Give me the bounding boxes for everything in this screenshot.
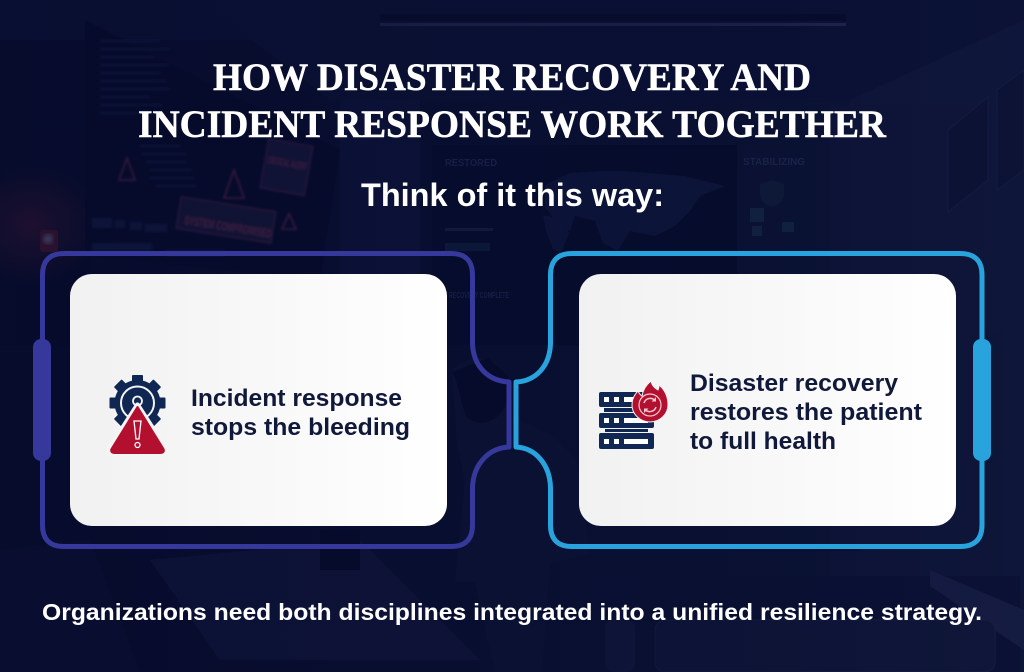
background panel: recovery screen (445, 157, 805, 300)
text: disaster recovery (690, 370, 922, 455)
text: disaster recovery: to full health (690, 428, 836, 455)
icon: gear with warning triangle (109, 375, 166, 454)
text: disaster recovery: Disaster recovery (690, 370, 898, 397)
frame: disaster recovery outline (516, 254, 982, 546)
text: incident response (191, 385, 410, 441)
background: person and desks (0, 358, 1024, 672)
card: incident response (70, 274, 447, 526)
title: HOW DISASTER RECOVERY AND (213, 56, 811, 99)
accent pill: right (973, 339, 991, 461)
background: right wall picture frames (948, 70, 1024, 212)
background panel: recovery screen: RESTORED (445, 158, 497, 169)
title (138, 56, 887, 146)
background panel: alerts screen: SYSTEM COMPROMISED (184, 213, 273, 241)
title: INCIDENT RESPONSE WORK TOGETHER (138, 103, 887, 146)
accent pill: left (33, 339, 51, 461)
text: disaster recovery: restores the patient (690, 399, 922, 426)
panel: incident response (33, 254, 509, 546)
icon: server stack with flame (599, 381, 668, 449)
text: incident response: stops the bleeding (191, 414, 410, 441)
subheading: Think of it this way: (361, 177, 664, 213)
background panel: recovery screen: STABILIZING (743, 157, 805, 168)
card: disaster recovery (579, 274, 956, 526)
panel: disaster recovery (516, 254, 991, 546)
frame: incident response outline (42, 254, 509, 546)
footer statement: Organizations need both disciplines integrated into a unified resilience strategy. (42, 599, 982, 625)
background panel: alerts screen (92, 40, 313, 256)
text: incident response: Incident response (191, 385, 402, 412)
background panel: recovery screen: RECOVERY COMPLETE (449, 291, 509, 300)
background panel: alerts screen: CRITICAL ALERT (266, 155, 308, 173)
